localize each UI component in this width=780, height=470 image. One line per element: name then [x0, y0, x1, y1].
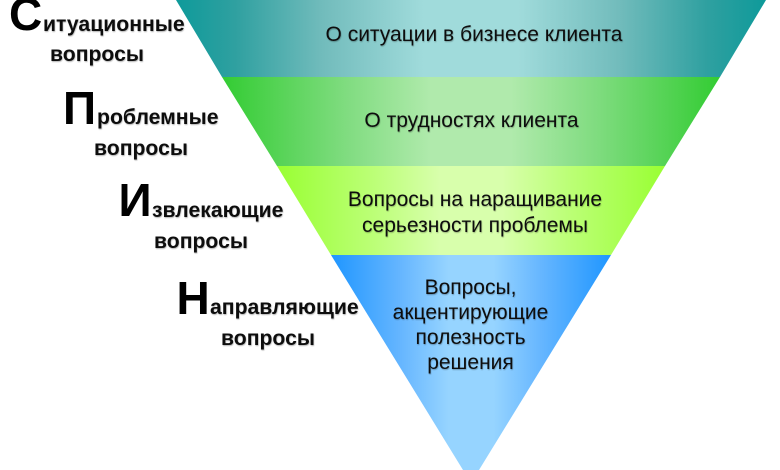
- label: situational questions: [9, 0, 185, 66]
- funnel band 3: implications: [277, 166, 665, 255]
- band 3 text: серьезности проблемы: [362, 214, 588, 237]
- label: problem questions: П: [63, 82, 96, 134]
- band 4 text: Вопросы,: [425, 276, 516, 299]
- label: need-payoff questions: вопросы: [221, 327, 315, 350]
- band 4 text: [393, 276, 548, 374]
- label: problem questions: роблемные: [97, 106, 219, 129]
- label: implication questions: [118, 174, 284, 253]
- band 4 text: полезность: [415, 326, 526, 349]
- band 4 text: решения: [427, 351, 514, 374]
- label: need-payoff questions: Н: [176, 272, 210, 324]
- band 3 text: [348, 188, 602, 237]
- funnel band 4: need-payoff: [331, 255, 611, 470]
- label: problem questions: вопросы: [94, 137, 188, 160]
- label: situational questions: вопросы: [50, 43, 144, 66]
- label: implication questions: И: [118, 174, 152, 226]
- label: problem questions: [63, 82, 219, 160]
- label: situational questions: итуационные: [43, 13, 185, 36]
- label: implication questions: звлекающие: [152, 199, 284, 222]
- label: need-payoff questions: [176, 272, 359, 350]
- label: implication questions: вопросы: [154, 230, 248, 253]
- funnel band 2: problems: [222, 77, 720, 166]
- band 4 text: акцентирующие: [393, 301, 548, 324]
- label: need-payoff questions: аправляющие: [210, 296, 359, 319]
- funnel band 1: situation: [176, 0, 766, 77]
- band 2 text: О трудностях клиента: [364, 109, 579, 132]
- band 3 text: Вопросы на наращивание: [348, 188, 602, 211]
- band 1 text: О ситуации в бизнесе клиента: [326, 23, 623, 46]
